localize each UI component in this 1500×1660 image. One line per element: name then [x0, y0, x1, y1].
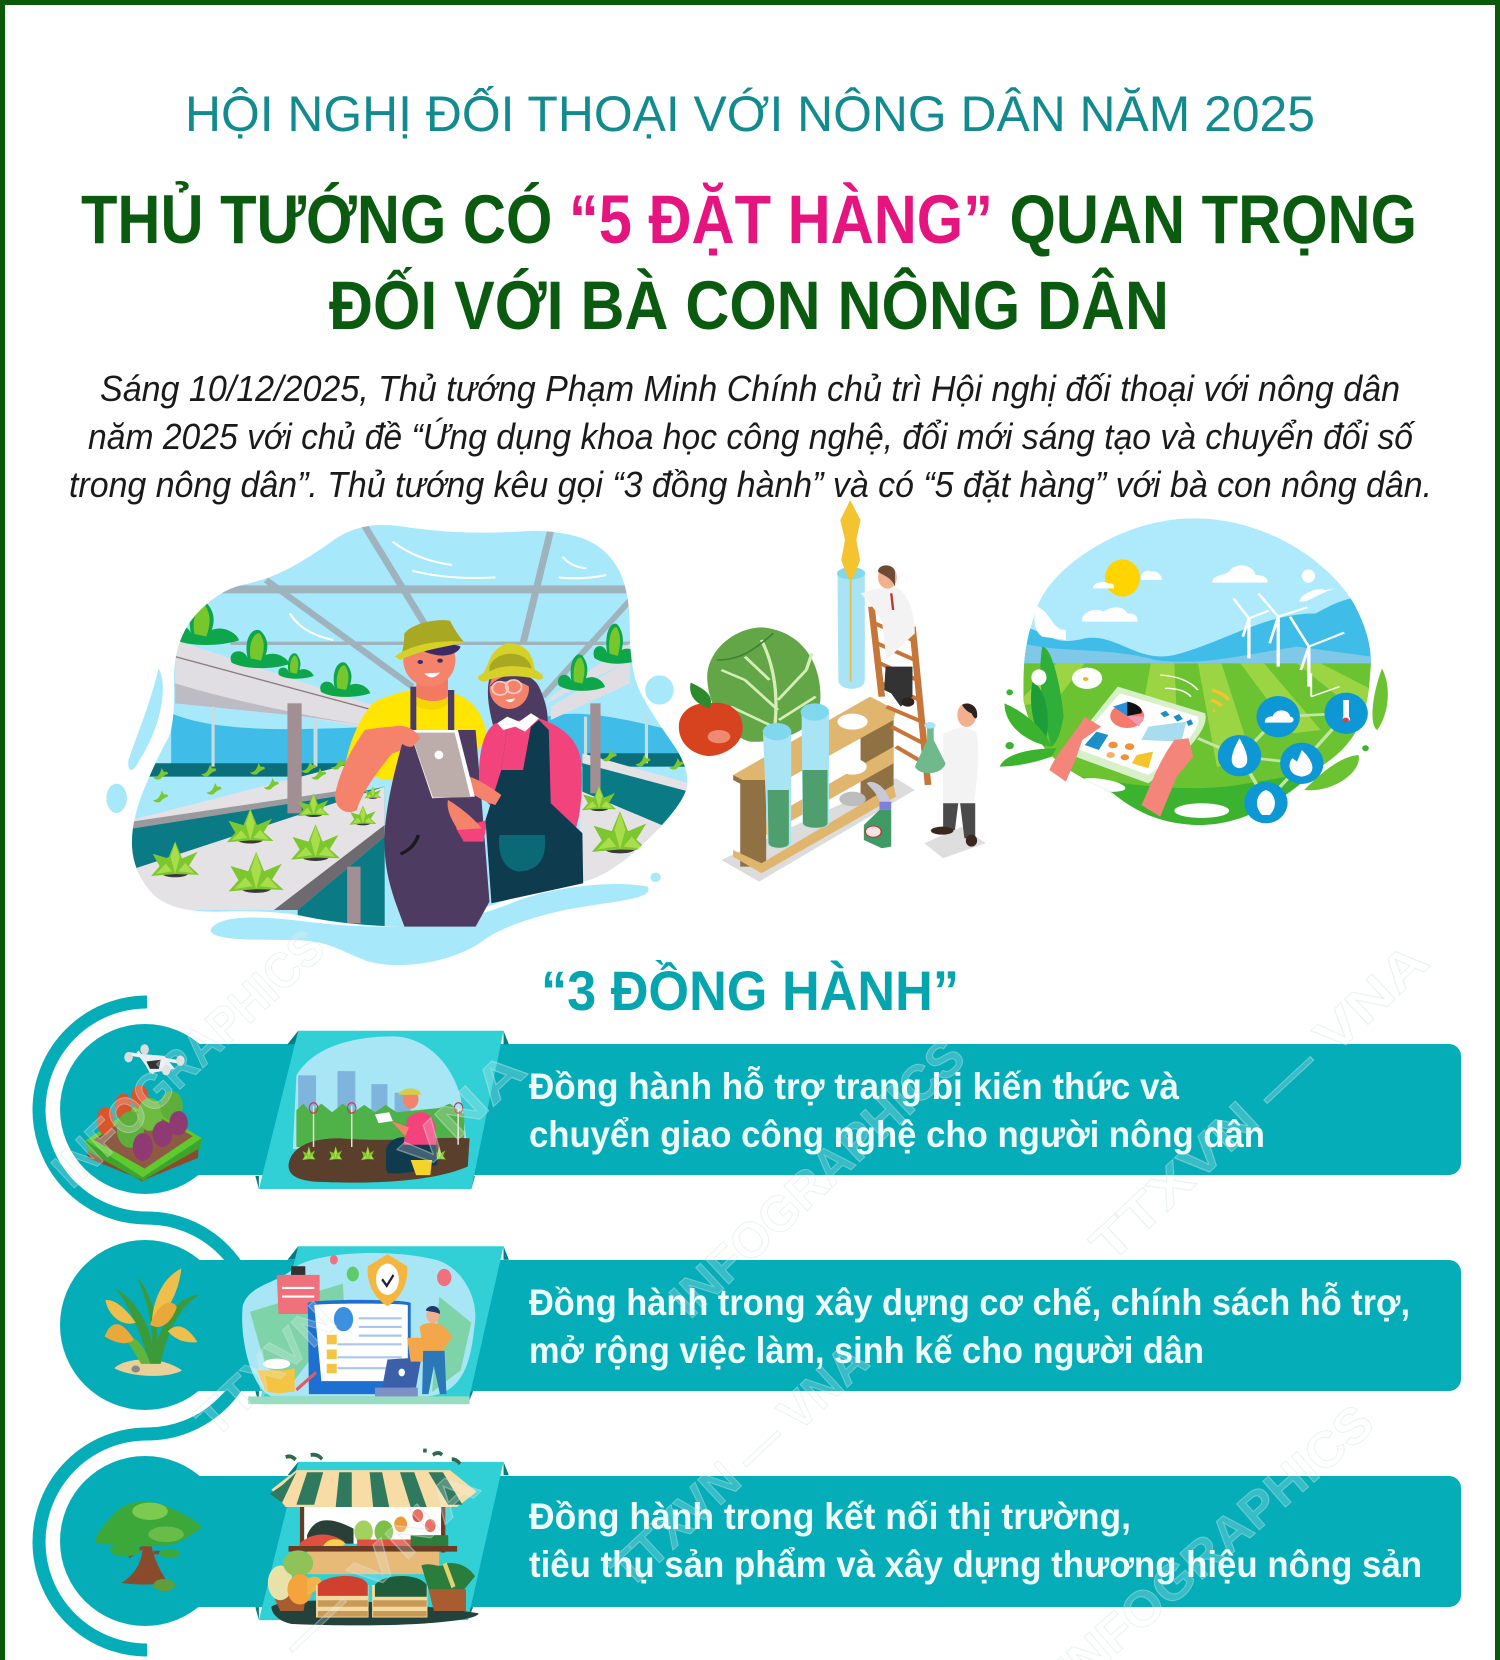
ladder [871, 607, 928, 785]
row 2 icon: rice plant [105, 1268, 200, 1376]
row 2 text: Đồng hành trong xây dựng cơ chế, chính sách hỗ trợ, [529, 1282, 1410, 1323]
test tubes [763, 703, 829, 848]
watermark: TTXVN [184, 1291, 347, 1448]
rack shadow and rack [721, 697, 915, 882]
row 3 text [529, 1496, 1422, 1585]
row 3 text: tiêu thụ sản phẩm và xây dựng thương hiệu nông sản [529, 1544, 1422, 1585]
tablet with hands [1049, 687, 1206, 817]
row 1 text: Đồng hành hỗ trợ trang bị kiến thức và [529, 1066, 1179, 1107]
watermark: INFOGRAPHICS [659, 1028, 975, 1328]
row 2 circle [60, 1240, 230, 1410]
wind turbines [1233, 593, 1344, 697]
tall tube with wheat [837, 500, 865, 689]
row 1 circle [60, 1024, 230, 1194]
row 3 bar [150, 1476, 1461, 1607]
section heading: “3 ĐỒNG HÀNH” [541, 959, 959, 1022]
watermark: INFOGRAPHICS [41, 918, 335, 1198]
header subtitle: HỘI NGHỊ ĐỐI THOẠI VỚI NÔNG DÂN NĂM 2025 [185, 85, 1315, 142]
spray bottle [864, 782, 891, 848]
row 1 banner panel with farmer [255, 1031, 509, 1189]
illustration: farmers in greenhouse [106, 524, 688, 966]
row 2 banner panel with documents [242, 1246, 509, 1404]
row 1 bar [150, 1044, 1461, 1175]
row 3: companion item [60, 1451, 1461, 1626]
clouds [1034, 565, 1335, 640]
row 3 circle [60, 1456, 230, 1626]
watermark: TTXVN — VNA [1079, 932, 1439, 1273]
main title: ĐỐI VỚI BÀ CON NÔNG DÂN [329, 267, 1169, 344]
scientist with flask [915, 703, 986, 858]
main title: THỦ TƯỚNG CÓ “5 ĐẶT HÀNG” QUAN TRỌNG [81, 181, 1417, 258]
row 2 text [529, 1282, 1410, 1371]
intro paragraph: năm 2025 với chủ đề “Ứng dụng khoa học công nghệ, đổi mới sáng tạo và chuyển đổi số [88, 416, 1416, 457]
connector arc [39, 1002, 255, 1650]
intro paragraph: trong nông dân”. Thủ tướng kêu gọi “3 đồng hành” và có “5 đặt hàng” với bà con nông dân. [69, 464, 1432, 505]
watermark [41, 918, 1439, 1660]
cabbage [707, 627, 820, 742]
illustration: smart farm tablet [1000, 513, 1388, 833]
row 1: companion item [60, 1024, 1461, 1194]
row 2: companion item [60, 1240, 1461, 1410]
watermark: VNA [389, 1040, 537, 1183]
green leaves and flowers [1000, 647, 1388, 790]
tablet [393, 726, 475, 798]
row 3 banner panel with market stall [255, 1451, 509, 1625]
row 2 text: mở rộng việc làm, sinh kế cho người dân [529, 1330, 1204, 1371]
intro paragraph: Sáng 10/12/2025, Thủ tướng Phạm Minh Chính chủ trì Hội nghị đối thoại với nông dân [100, 368, 1400, 409]
intro paragraph [69, 368, 1432, 505]
main title [81, 181, 1417, 344]
apple [679, 683, 743, 756]
row 3 text: Đồng hành trong kết nối thị trường, [529, 1496, 1131, 1537]
row 3 icon: bonsai tree [95, 1502, 203, 1591]
watermark: TTXVN — VNA [599, 1332, 879, 1598]
scientist on ladder [861, 565, 915, 707]
woman farmer [448, 643, 583, 903]
sensor network icons [1198, 693, 1368, 823]
row 1 text [529, 1066, 1265, 1155]
illustration: lab scientists and vegetables [679, 500, 986, 882]
row 1 text: chuyển giao công nghệ cho người nông dân [529, 1114, 1265, 1155]
row 2 bar [150, 1260, 1461, 1391]
man farmer [335, 620, 489, 927]
wifi symbol [1211, 690, 1229, 711]
row 1 icon: drone over vegetable bed [86, 1044, 202, 1182]
